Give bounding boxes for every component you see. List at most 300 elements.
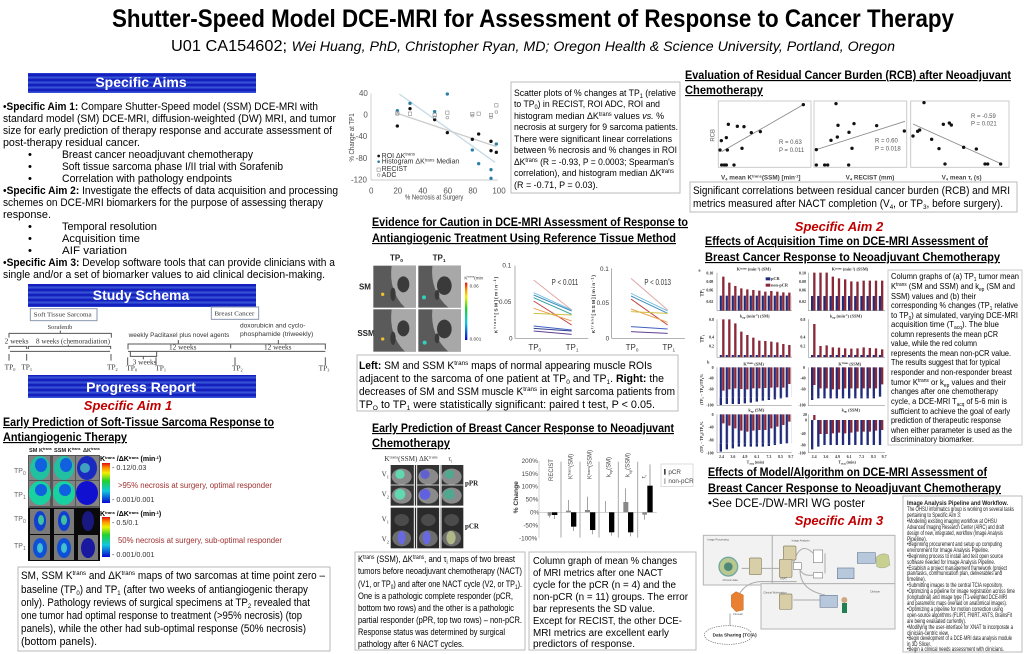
diagram: treatment timelines: TP (21, 363, 30, 372)
chart: acquisition time column graphs: ) (SSM) (854, 267, 869, 272)
text box: column graph caption: predictors of response. (533, 639, 635, 650)
figure: reference tissue maps and line plots: 0.05 (597, 300, 609, 307)
chart: mean % changes: (SSM) (588, 450, 594, 467)
chart: scatter of % change vs necrosis: Median (434, 159, 459, 166)
chart: acquisition time column graphs: -1 (755, 313, 758, 317)
figure: reference tissue maps and line plots: TP (566, 343, 576, 352)
chart: scatter of % change vs necrosis: trans (405, 152, 415, 157)
text: aims list: • (28, 173, 32, 185)
text box: acquisition time caption: column represents the mean pCR (891, 329, 998, 339)
diagram: treatment timelines: phosphamide (triweekly) (240, 331, 313, 338)
text box: scatter description: correlation), and histogram median ΔK (514, 168, 671, 178)
text box: acquisition time caption: tumor mean (976, 271, 1019, 281)
diagram: treatment timelines: 0 (13, 367, 15, 372)
chart: acquisition time column graphs: 0.06 (706, 287, 713, 292)
chart: acquisition time column graphs: (min (842, 267, 852, 272)
chart: acquisition time column graphs: 0.4 (800, 334, 805, 339)
figure: reference tissue maps and line plots: 0.05 (499, 299, 512, 306)
text box: sarcoma caption: maps of two sarcomas at time point zero – (135, 570, 325, 582)
chart: acquisition time column graphs: (min) (845, 459, 856, 464)
chart: scatter of % change vs necrosis: -120 (351, 175, 368, 184)
chart: acquisition time column graphs: 0.8 (709, 317, 714, 322)
panel: study schema (5, 284, 329, 373)
chart: acquisition time column graphs: )/TP (699, 379, 704, 387)
figure: reference tissue maps and line plots: -1 (590, 278, 594, 282)
text box: breast maps caption: K (358, 554, 364, 564)
chart: RCB correlation scatter plots: R = 0.60 (875, 139, 898, 145)
figure: reference tissue maps and line plots: 1 (673, 348, 676, 353)
figure: reference tissue maps and line plots: trans (493, 316, 497, 329)
banner: study schema (28, 284, 256, 307)
chart: acquisition time column graphs: 0 (702, 434, 705, 436)
figure: breast tumor maps: 1 (387, 519, 389, 524)
text: aims list: Acquisition time (62, 233, 140, 245)
chart: acquisition time column graphs: 0.02 (706, 299, 713, 304)
chart: acquisition time column graphs: 0.08 (706, 279, 713, 284)
chart: mean % changes: -50% (523, 522, 538, 529)
chart: mean % changes: RECIST (549, 459, 555, 481)
chart: mean % changes: 0% (530, 509, 540, 516)
chart: acquisition time column graphs: 3.6 (730, 454, 735, 459)
chart: scatter of % change vs necrosis: -80 (356, 154, 368, 163)
banner: specific aims (28, 73, 256, 93)
chart: scatter of % change vs necrosis: 40 (359, 89, 368, 98)
heading: acquisition time (705, 236, 1001, 264)
heading: sarcoma prediction (3, 417, 274, 444)
text box: reference tissue caption: adjacent to the sarcoma of one patient at TP (359, 373, 567, 385)
text box: column graph caption: cycle for the pCR (n = 4) and the (533, 580, 676, 591)
chart: acquisition time column graphs: ) (SM) (758, 313, 770, 318)
chart: acquisition time column graphs: k (748, 408, 751, 413)
text box: acquisition time caption: Column graphs of (a) TP (891, 271, 986, 281)
chart: mean % changes: -100% (519, 535, 538, 542)
chart: scatter of % change vs necrosis: 100 (492, 186, 506, 195)
chart: acquisition time column graphs: k (740, 313, 742, 318)
chart: acquisition time column graphs: 1 (701, 288, 705, 290)
chart: acquisition time column graphs (698, 266, 887, 465)
chart: acquisition time column graphs: 0 (702, 377, 705, 379)
text box: acquisition time caption: relative (992, 300, 1018, 310)
heading: breast cancer prediction: Early Prediction of Breast Cancer Response to Neoadjuvant (372, 423, 674, 435)
chart: acquisition time column graphs: -40 (800, 431, 806, 436)
figure: breast tumor maps: i (451, 459, 453, 464)
figure: reference tissue maps and line plots: 0 (606, 335, 610, 342)
text box: sarcoma caption: trans (122, 570, 136, 577)
diagram: treatment timelines: 0 (135, 368, 137, 373)
chart: acquisition time column graphs: 0.4 (709, 334, 714, 339)
diagram: treatment timelines: TP (232, 363, 241, 372)
text box: reference tissue caption: trans (523, 386, 538, 393)
text box: acquisition time caption: (SM and SSM) and k (907, 281, 980, 291)
figure: sarcoma parametric maps: /ΔK (115, 511, 129, 518)
chart: acquisition time column graphs: k (830, 313, 832, 318)
text box: acquisition time caption: trans (896, 282, 907, 288)
diagram: image analysis pipeline: Clinical Workstation (763, 590, 787, 594)
figure: reference tissue maps and line plots: 1 (443, 258, 446, 264)
text box: acquisition time caption: trans (918, 378, 929, 384)
text box: RCB caption (690, 182, 1017, 212)
chart: acquisition time column graphs: 4.9 (742, 454, 747, 459)
chart: acquisition time column graphs: 0 (702, 386, 705, 388)
text box: scatter description: histogram median ΔK (514, 111, 602, 121)
text box: acquisition time caption: The results suggest that for typical (891, 357, 1000, 367)
chart: acquisition time column graphs: 1 (702, 397, 705, 399)
text box: reference tissue caption: 1 (407, 405, 411, 412)
figure: reference tissue maps and line plots: 0 (509, 335, 513, 342)
label: specific aim 2: Specific Aim 2 (795, 219, 884, 234)
figure: breast tumor maps: 2 (387, 539, 389, 544)
banner: progress report (28, 375, 256, 398)
text box: sarcoma caption: panels), while the other had sub-optimal response (50% necrosis) (21, 623, 306, 635)
diagram: treatment timelines: TP (126, 363, 135, 372)
text box: image analysis pipeline and workflow: environment for Image Analysis Pipeline. (907, 548, 989, 554)
diagram: treatment timelines: 1 (164, 368, 166, 373)
text box: sarcoma caption: one tumor had optimal response to treatment (>95% necrosis) (top (21, 610, 302, 622)
figure: sarcoma parametric maps: TP (14, 492, 23, 499)
figure: sarcoma parametric maps: - 0.001/0.001 (112, 495, 154, 504)
text box: breast maps caption: pathology after 6 NACT cycles. (358, 639, 464, 649)
diagram: treatment timelines: 12 weeks (264, 342, 292, 351)
text box: acquisition time caption: acq (957, 402, 964, 408)
text box: breast maps caption: 0 (391, 585, 394, 591)
chart: scatter of % change vs necrosis: 0 (369, 186, 374, 195)
text box: RCB caption: Significant correlations between residual cancer burden (RCB) and MRI (693, 185, 1010, 197)
diagram: image analysis pipeline: Image Processing (707, 538, 729, 542)
chart: acquisition time column graphs: -100 (798, 450, 806, 455)
chart: acquisition time column graphs: trans (842, 361, 849, 365)
heading: sarcoma prediction: Antiangiogenic Therapy (3, 432, 128, 444)
text box: reference tissue caption: 1 (607, 379, 611, 386)
banner: progress report: Progress Report (86, 379, 196, 395)
chart: RCB correlation scatter plots: trans (752, 173, 763, 178)
text: aims list: • (28, 233, 32, 245)
chart: acquisition time column graphs: (SM) (753, 361, 764, 366)
chart: acquisition time column graphs: 9.7 (788, 454, 793, 459)
chart: RCB correlation scatter plots: (SSM) [min (762, 174, 795, 181)
figure: breast tumor maps: pCR (465, 522, 480, 530)
text box: scatter description: (R = -0.71, P = 0.03). (514, 180, 598, 190)
figure: breast tumor maps: V (382, 516, 387, 524)
figure: sarcoma parametric maps: - 0.12/0.03 (112, 463, 146, 472)
chart: acquisition time column graphs: 0 (712, 365, 714, 370)
text box: acquisition time caption: values and their (949, 377, 1006, 387)
chart: acquisition time column graphs: (min (745, 313, 756, 318)
chart: acquisition time column graphs: K (838, 361, 842, 366)
chart: acquisition time column graphs: 0 (803, 365, 805, 370)
panel: specific aims (3, 73, 338, 281)
figure: sarcoma parametric maps: - 0.5/0.1 (112, 518, 138, 527)
figure: reference tissue maps and line plots: 0.1 (600, 266, 609, 273)
figure: reference tissue maps and line plots: ) (494, 276, 500, 278)
banner: study schema: Study Schema (93, 287, 189, 303)
chart: mean % changes: k (626, 474, 632, 477)
text box: breast maps caption: maps of two breast (448, 554, 515, 564)
text box: image analysis pipeline and workflow: are being evaluated currently). (907, 619, 966, 625)
text box: breast maps caption: ). (518, 579, 522, 589)
figure: breast tumor maps: K (384, 455, 389, 463)
chart: RCB correlation scatter plots: ] (798, 174, 801, 181)
chart: RCB correlation scatter plots: R = 0.63 (779, 140, 802, 146)
diagram: treatment timelines: TP (5, 363, 13, 372)
diagram: image analysis pipeline: Firewall (733, 612, 743, 616)
text box: RCB caption: 4 (890, 204, 894, 211)
figure: sarcoma parametric maps: (min (139, 511, 155, 518)
text box: reference tissue caption: . (610, 373, 616, 385)
chart: mean % changes: τ (641, 476, 647, 478)
figure: breast tumor maps (382, 455, 480, 548)
chart: acquisition time column graphs: 0 (805, 418, 807, 423)
text: aims list: size for early prediction of therapy response and accurate assessment of (3, 125, 333, 137)
chart: acquisition time column graphs: -40 (708, 424, 714, 429)
text box: acquisition time caption: value, while the red column (891, 338, 977, 348)
text box: scatter description (511, 82, 680, 193)
text box: breast maps caption: (V1, or TP (358, 579, 400, 589)
diagram: treatment timelines: 2 (241, 368, 243, 373)
chart: acquisition time column graphs: 0.2 (800, 343, 805, 348)
figure: reference tissue maps and line plots: 0 (636, 348, 639, 353)
chart: RCB correlation scatter plots: i (971, 177, 972, 182)
chart: mean % changes: % Change (513, 481, 520, 513)
diagram: treatment timelines: 3 (327, 368, 329, 373)
text box: image analysis pipeline and workflow: clinician-centric view. (907, 631, 949, 637)
text box: acquisition time caption: of 5-6 min is (964, 396, 1008, 406)
chart: acquisition time column graphs: -80 (708, 438, 714, 443)
figure: reference tissue maps and line plots: TP (390, 253, 400, 262)
label: specific aim 3: Specific Aim 3 (795, 513, 884, 528)
chart: RCB correlation scatter plots: -1 (795, 173, 799, 178)
chart: mean % changes: (SM) (606, 457, 612, 470)
text box: sarcoma caption: (after two weeks of antiangiogenic therapy (121, 584, 309, 596)
text box: scatter description: trans (661, 169, 674, 175)
text box: scatter description: between % necrosis and % changes in ROI (514, 145, 677, 155)
text box: scatter description: trans (525, 158, 538, 164)
text: aims list: schemes on DCE-MRI biomarkers for the purpose of assessing therapy (3, 197, 323, 209)
chart: RCB correlation scatter plots: mean K (727, 174, 753, 181)
text box: breast maps caption: tumors before neoadjuvant chemotherapy (NACT) (358, 566, 522, 576)
chart: scatter of % change vs necrosis: -40 (356, 132, 368, 141)
text box: scatter description: values (612, 111, 642, 121)
diagram: treatment timelines: 3 weeks (133, 358, 157, 367)
text: aims list: Breast cancer neoadjuvant chemotherapy (62, 149, 253, 161)
figure: breast tumor maps: 1 (387, 474, 389, 479)
chart: acquisition time column graphs: 0.06 (799, 287, 806, 292)
figure: sarcoma parametric maps: >95% necrosis at surgery, optimal responder (118, 481, 272, 490)
figure: sarcoma parametric maps: trans (43, 447, 52, 451)
chart: mean % changes: ep (609, 470, 613, 474)
text box: reference tissue caption (357, 355, 678, 412)
diagram: image analysis pipeline: Data Sharing (TCIA) (713, 633, 757, 638)
figure: breast tumor maps: trans (429, 455, 438, 460)
chart: acquisition time column graphs: 2.4 (812, 454, 817, 459)
figure: reference tissue maps and line plots: 0.001 (470, 337, 482, 342)
figure: sarcoma parametric maps: 1 (23, 495, 26, 501)
chart: acquisition time column graphs: ) (SSM) (848, 313, 863, 318)
text box: breast maps caption: trans (413, 555, 424, 561)
chart: scatter of % change vs necrosis: 60 (443, 186, 453, 195)
chart: mean % changes: (SM) (568, 454, 574, 467)
figure: sarcoma parametric maps: trans (72, 447, 81, 451)
diagram: treatment timelines: Breast Cancer (214, 311, 255, 318)
text box: reference tissue caption: decreases of SM and SSM muscle K (359, 386, 532, 398)
chart: acquisition time column graphs: 2.4 (719, 454, 724, 459)
figure: reference tissue maps and line plots: P < 0.011 (552, 278, 579, 287)
figure: reference tissue maps and line plots: (min (474, 275, 484, 280)
panel: progress report (3, 375, 330, 651)
text box: image analysis pipeline and workflow: software needed for Image Analysis Pipeline. (907, 560, 995, 566)
chart: acquisition time column graphs: a (698, 268, 701, 273)
chart: scatter of % change vs necrosis: 40 (418, 186, 428, 195)
text box: scatter description: to TP (514, 99, 536, 109)
chart: acquisition time column graphs: -80 (800, 443, 806, 448)
text box: image analysis pipeline and workflow: in 3D Slicer. (907, 642, 931, 648)
chart: mean % changes: pCR (668, 469, 681, 476)
chart: acquisition time column graphs: 0 (712, 412, 714, 417)
chart: mean % changes: 200% (522, 458, 538, 465)
chart: acquisition time column graphs: 6.1 (754, 454, 759, 459)
text box: column graph caption: Column graph of mean % changes (533, 556, 677, 567)
chart: acquisition time column graphs: K (832, 267, 835, 272)
chart: mean % changes (513, 450, 694, 542)
chart: acquisition time column graphs: -60 (800, 387, 806, 392)
figure: breast tumor maps: 2 (387, 494, 389, 499)
heading: sarcoma prediction: Early Prediction of Soft-Tissue Sarcoma Response to (3, 417, 274, 429)
figure: reference tissue maps and line plots: K (464, 275, 467, 280)
text box: scatter description: (relative (643, 88, 676, 98)
chart: acquisition time column graphs: T (747, 459, 749, 464)
diagram: treatment timelines: weekly Paclitaxel plus novel agents (128, 332, 229, 339)
text box: scatter description: 0 (534, 105, 538, 111)
chart: acquisition time column graphs: K (743, 361, 747, 366)
chart: RCB correlation scatter plots: P = 0.018 (875, 147, 901, 153)
chart: RCB correlation scatter plots: V (942, 174, 946, 181)
chart: acquisition time column graphs: (TP (699, 446, 704, 453)
figure: sarcoma parametric maps: TP (14, 516, 23, 523)
text box: column graph caption: non-pCR (n = 11) groups. The error (533, 592, 689, 603)
chart: acquisition time column graphs: 0 (702, 425, 705, 427)
text: aims list: • (28, 149, 32, 161)
text box: scatter description: trans (599, 112, 612, 118)
chart: acquisition time column graphs: TP (700, 290, 705, 297)
chart: scatter of % change vs necrosis: ADC (382, 172, 396, 179)
diagram: treatment timelines: 1 (30, 367, 32, 372)
figure: sarcoma parametric maps: SSM K (54, 448, 72, 454)
figure: reference tissue maps and line plots: 0.1 (502, 263, 512, 270)
chart: acquisition time column graphs: 0.10 (706, 271, 713, 276)
diagram: treatment timelines: Soft Tissue Sarcoma (34, 312, 92, 319)
heading: reference tissue method: Evidence for Caution in DCE-MRI Assessment of Response to (372, 217, 688, 229)
text box: acquisition time caption: or k (929, 377, 944, 387)
text: aims list: •Specific Aim 3: Develop software tools that can provide clinicians with a (3, 257, 336, 269)
text box: breast maps caption: ) and after one NACT cycle (V2, or TP (393, 579, 515, 589)
text box: sarcoma caption: trans (72, 570, 87, 577)
text: aims list: •Specific Aim 1: Compare Shutter-Speed model (SSM) DCE-MRI with (3, 101, 318, 113)
chart: scatter of % change vs necrosis (347, 89, 506, 201)
chart: acquisition time column graphs: -1 (756, 266, 759, 270)
chart: RCB correlation scatter plots: RCB (710, 129, 716, 142)
text box: scatter description: Scatter plots of % changes at TP (514, 88, 648, 98)
chart: acquisition time column graphs: 1 (701, 334, 705, 336)
chart: scatter of % change vs necrosis: % Change at TP1 (347, 113, 356, 162)
chart: acquisition time column graphs: 0.2 (709, 343, 714, 348)
chart: acquisition time column graphs: % (699, 374, 704, 378)
figure: sarcoma parametric maps: -1 (155, 510, 160, 515)
figure: reference tissue maps and line plots: TP (626, 343, 636, 352)
heading: residual cancer burden: Evaluation of Residual Cancer Burden (RCB) after Neoadjuvant (685, 70, 1011, 82)
figure: reference tissue maps and line plots: P < 0.013 (644, 278, 671, 287)
text box: sarcoma caption: SM, SSM K (21, 570, 76, 582)
chart: acquisition time column graphs: trans (835, 266, 843, 270)
figure: sarcoma parametric maps: TP (14, 468, 23, 475)
figure: breast tumor maps: (SSM) ΔK (398, 455, 429, 463)
figure: reference tissue maps and line plots: [SSM](min (591, 283, 597, 315)
text box: acquisition time caption: (SM and (984, 281, 1015, 291)
text box: column graph caption: bar represents the SD value. (533, 604, 655, 615)
chart: mean % changes: K (588, 475, 594, 479)
text box: acquisition time caption: 1 (990, 306, 992, 312)
diagram: treatment timelines: TP (319, 363, 327, 372)
text box: acquisition time caption: ep (944, 383, 949, 389)
heading: model algorithm (708, 467, 1002, 495)
diagram: treatment timelines: 2 weeks (5, 336, 29, 345)
text box: reference tissue caption: were statistically significant: paired t test, P < 0.05. (410, 399, 655, 411)
text box: acquisition time caption: cycle, a DCE-MRI T (891, 396, 968, 406)
chart: acquisition time column graphs: 4.9 (835, 454, 840, 459)
chart: acquisition time column graphs: trans (747, 361, 754, 365)
chart: acquisition time column graphs: (TP (699, 399, 704, 405)
diagram: treatment timelines: 8 weeks (chemoradiation) (36, 336, 111, 345)
chart: scatter of % change vs necrosis: ROI ΔK (382, 153, 405, 160)
text box: sarcoma caption: and ΔK (86, 570, 122, 582)
heading: breast cancer prediction: Chemotherapy (372, 438, 451, 450)
chart: RCB correlation scatter plots: mean τ (948, 174, 971, 181)
chart: scatter of % change vs necrosis: 20 (393, 186, 403, 195)
figure: breast tumor maps: trans (390, 455, 399, 460)
chart: acquisition time column graphs: (SSM) (848, 361, 862, 366)
banner: specific aims: Specific Aims (95, 74, 187, 90)
figure: sarcoma parametric maps: trans (129, 510, 139, 515)
text box: scatter description: 1 (640, 94, 643, 100)
chart: RCB correlation scatter plots: P = 0.011 (779, 148, 805, 154)
diagram: image analysis pipeline: XNAT (780, 576, 787, 580)
chart: RCB correlation scatter plots: R = -0.59 (971, 114, 996, 120)
chart: mean % changes: trans (587, 467, 591, 475)
text box: scatter description: There were significant linear correlations (514, 134, 672, 144)
chart: RCB correlation scatter plots: 4 (725, 177, 728, 182)
heading: model algorithm: Effects of Model/Algorithm on DCE-MRI Assessment of (708, 467, 987, 479)
figure: breast tumor maps: τ (448, 455, 451, 463)
diagram: image analysis pipeline: Image Analysis (792, 538, 810, 542)
chart: acquisition time column graphs: pCR (771, 276, 781, 281)
figure: sarcoma parametric maps: - 0.001/0.001 (112, 550, 154, 559)
text: aims list: •Specific Aim 2: Investigate the effects of data acquisition and processing (3, 185, 338, 197)
text box: sarcoma caption: 2 (248, 603, 252, 610)
chart: acquisition time column graphs: -60 (708, 387, 714, 392)
figure: breast tumor maps: V (382, 471, 387, 479)
text box: image analysis pipeline and workflow: timeline). (907, 577, 926, 583)
chart: acquisition time column graphs: 0.8 (800, 317, 805, 322)
figure: reference tissue maps and line plots: ) (591, 275, 597, 277)
chart: acquisition time column graphs: -100 (706, 403, 714, 408)
text: aims list: • (28, 161, 32, 173)
figure: reference tissue maps and line plots (357, 253, 685, 353)
figure: sarcoma parametric maps: (min (139, 456, 155, 463)
chart: acquisition time column graphs: 8.5 (871, 454, 876, 459)
chart: RCB correlation scatter plots (710, 101, 1009, 182)
text box: breast maps caption: i (447, 560, 448, 566)
chart: scatter of % change vs necrosis: % Necrosis at Surgery (405, 192, 464, 201)
chart: RCB correlation scatter plots: P = 0.021 (971, 122, 997, 128)
text box: acquisition time caption: 0 (909, 316, 911, 322)
